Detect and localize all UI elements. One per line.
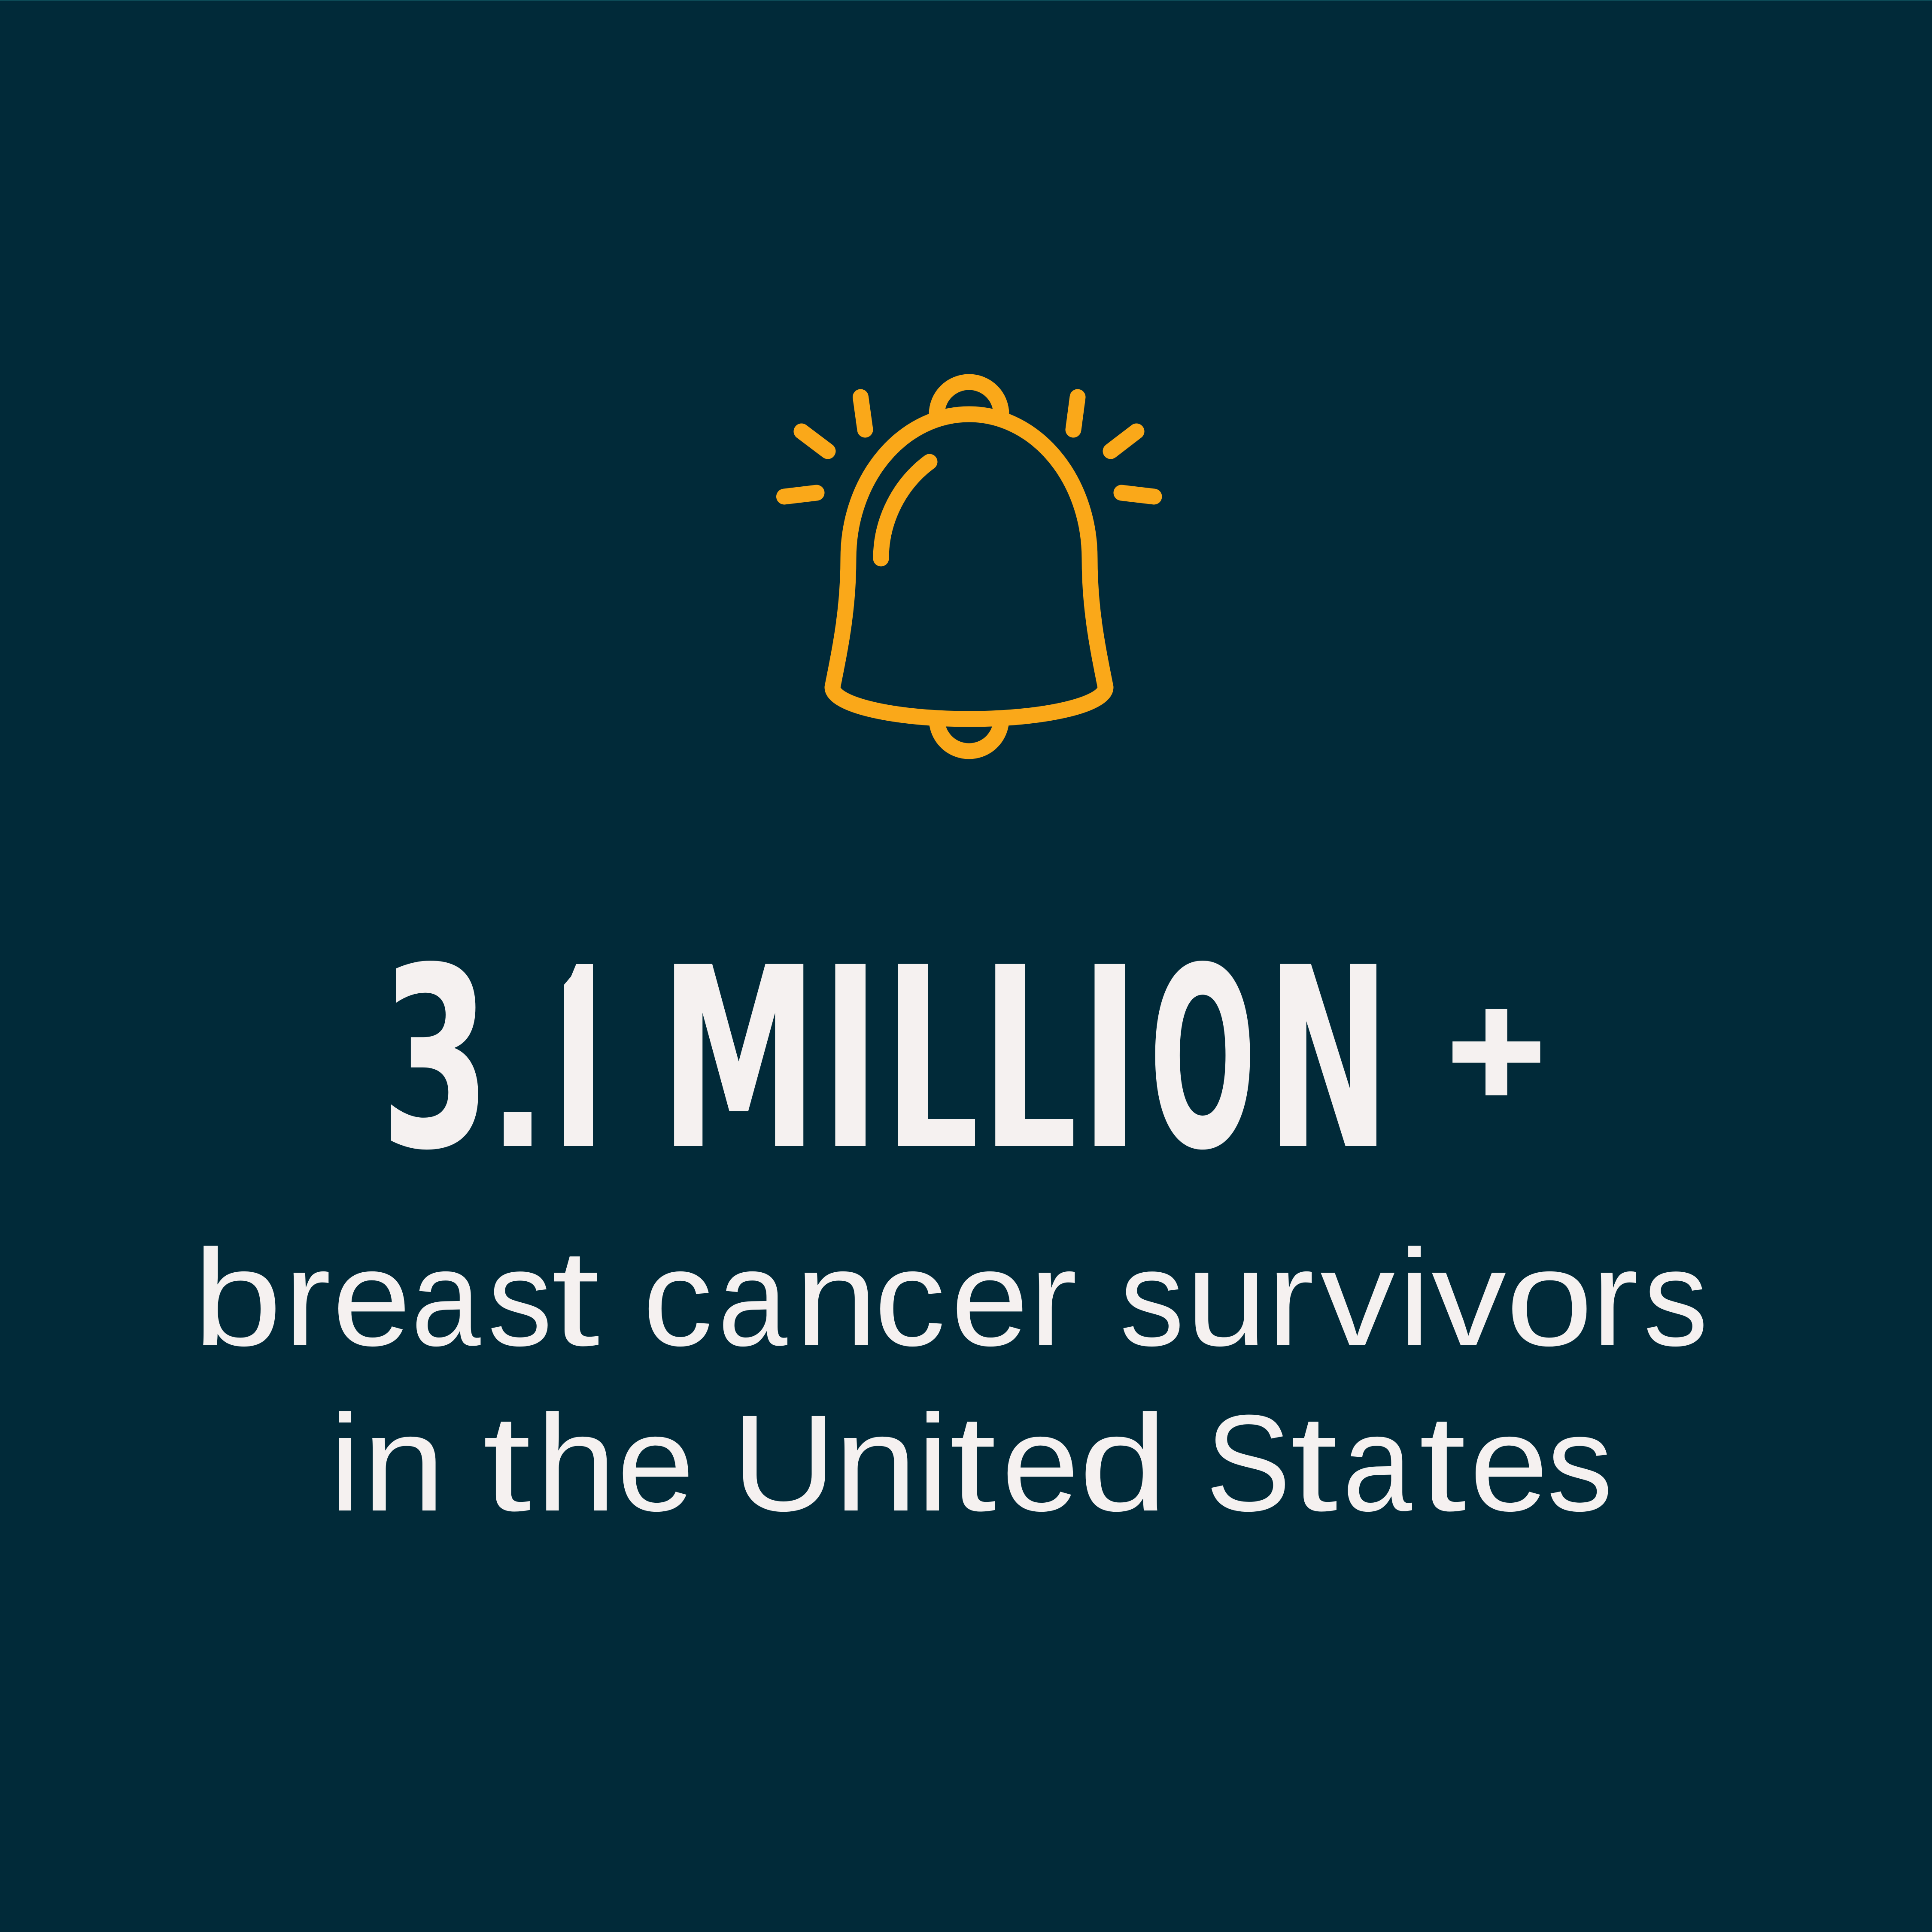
subheading line 2: t bbox=[1419, 1386, 1467, 1540]
heading: 3.1 MILLION +: O bbox=[1149, 914, 1256, 1205]
subheading line 1: s bbox=[1643, 1221, 1708, 1374]
heading: 3.1 MILLION +: N bbox=[1267, 914, 1390, 1205]
subheading line 1: e bbox=[951, 1221, 1029, 1374]
infographic canvas bbox=[0, 0, 1932, 1512]
subheading line 1: i bbox=[1399, 1221, 1430, 1374]
subheading line 2: s bbox=[1547, 1386, 1613, 1540]
subheading line 1: u bbox=[1186, 1222, 1267, 1375]
bell top loop bbox=[937, 382, 1001, 414]
subheading line 1: o bbox=[1506, 1221, 1593, 1374]
subheading line 1: s bbox=[488, 1221, 552, 1374]
right ringing rays bbox=[1073, 397, 1154, 497]
subheading line 2: a bbox=[1343, 1386, 1413, 1540]
subheading line 2: n bbox=[362, 1386, 445, 1540]
subheading line 2: i bbox=[917, 1386, 948, 1540]
heading: 3.1 MILLION +: I bbox=[820, 914, 881, 1205]
subheading line 1: v bbox=[1431, 1221, 1506, 1374]
subheading line 1 bbox=[193, 1221, 1708, 1375]
heading: 3.1 MILLION +: + bbox=[1442, 974, 1551, 1122]
icon: ringing bell bbox=[784, 382, 1154, 751]
subheading line 1: e bbox=[332, 1221, 411, 1374]
left ringing rays bbox=[784, 397, 865, 497]
subheading line 1: r bbox=[1267, 1221, 1314, 1374]
heading: 3.1 MILLION +: . bbox=[488, 980, 547, 1189]
subheading line 1: s bbox=[1120, 1221, 1184, 1374]
subheading line 2: S bbox=[1206, 1386, 1291, 1540]
heading: 3.1 MILLION +: L bbox=[981, 914, 1082, 1205]
heading: 3.1 MILLION +: M bbox=[659, 915, 818, 1205]
subheading line 2 bbox=[329, 1386, 1613, 1540]
subheading line 2: e bbox=[1002, 1386, 1079, 1540]
bell highlight bbox=[881, 462, 930, 558]
heading: 3.1 MILLION +: I bbox=[1080, 914, 1140, 1205]
subheading line 1: b bbox=[193, 1221, 282, 1374]
subheading line 1: a bbox=[718, 1221, 788, 1374]
subheading line 2: t bbox=[1291, 1386, 1338, 1540]
subheading line 1: r bbox=[284, 1221, 331, 1374]
subheading line 2: d bbox=[1079, 1386, 1167, 1540]
bell body bbox=[832, 414, 1106, 719]
bell clapper bbox=[937, 719, 1001, 751]
subheading line 1: n bbox=[795, 1221, 878, 1374]
subheading line 1: c bbox=[874, 1221, 945, 1375]
heading: 3.1 MILLION + bbox=[391, 961, 1540, 1149]
subheading line 1: v bbox=[1320, 1221, 1395, 1374]
subheading line 2: t bbox=[483, 1386, 532, 1540]
subheading line 2: h bbox=[536, 1387, 616, 1540]
subheading line 1: r bbox=[1592, 1221, 1638, 1374]
subheading line 1: t bbox=[551, 1221, 600, 1374]
subheading line 2: e bbox=[1470, 1386, 1548, 1540]
heading: 3.1 MILLION +: 1 bbox=[510, 915, 637, 1205]
subheading line 1: c bbox=[643, 1221, 713, 1374]
subheading line 1: a bbox=[411, 1221, 481, 1374]
subheading line 2: t bbox=[949, 1386, 997, 1540]
subheading line 2: e bbox=[617, 1386, 695, 1540]
subheading line 1: r bbox=[1029, 1221, 1077, 1374]
subheading line 2: U bbox=[732, 1386, 836, 1540]
subheading line 2: i bbox=[329, 1386, 361, 1540]
subheading line 2: n bbox=[834, 1386, 917, 1540]
heading: 3.1 MILLION +: L bbox=[883, 914, 985, 1205]
heading: 3.1 MILLION +: 3 bbox=[380, 914, 491, 1205]
